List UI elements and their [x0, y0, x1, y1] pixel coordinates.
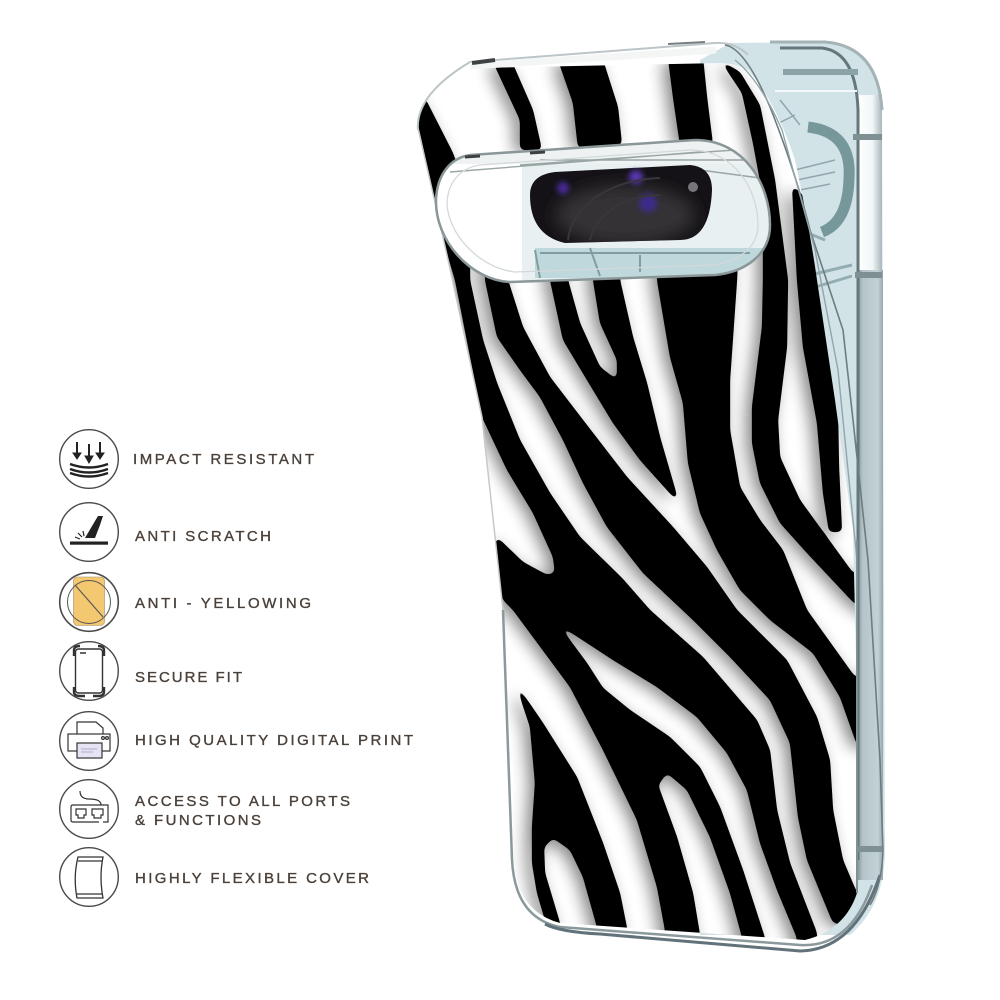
label: anti yellowing: ANTI - YELLOWING	[135, 595, 311, 612]
clear case frame and edges	[418, 42, 883, 951]
camera cut-out lens cover	[436, 140, 772, 285]
icon: anti scratch	[60, 503, 118, 561]
icon: impact resistant	[60, 430, 118, 488]
label: functions line: & FUNCTIONS	[135, 812, 261, 829]
icon: ports	[60, 780, 118, 838]
feature row: anti yellowing	[60, 573, 311, 631]
camera glass	[530, 165, 712, 243]
label: high quality digital print: HIGH QUALITY DIGITAL PRINT	[135, 732, 413, 749]
label: highly flexible cover: HIGHLY FLEXIBLE COVER	[135, 870, 369, 887]
camera ring on phone	[808, 127, 849, 232]
icon: secure fit	[60, 642, 118, 700]
feature row: secure fit	[60, 642, 242, 700]
label: secure fit: SECURE FIT	[135, 669, 242, 686]
icon: printer	[60, 712, 118, 770]
label: impact resistant: IMPACT RESISTANT	[133, 451, 314, 468]
label: access to all ports and functions: ACCESS TO ALL PORTS	[135, 793, 350, 810]
label: anti scratch: ANTI SCRATCH	[135, 528, 271, 545]
feature row: impact resistant	[60, 430, 314, 488]
phone case product image	[400, 42, 885, 960]
phone body behind clear case	[700, 42, 885, 935]
feature row: access to all ports and functions	[60, 780, 350, 838]
icon: anti yellowing	[60, 573, 118, 631]
feature row: high quality digital print	[60, 712, 413, 770]
feature row: anti scratch	[60, 503, 271, 561]
icon: flexible cover	[60, 848, 118, 906]
zebra print back panel	[418, 63, 857, 940]
feature row: highly flexible cover	[60, 848, 369, 906]
